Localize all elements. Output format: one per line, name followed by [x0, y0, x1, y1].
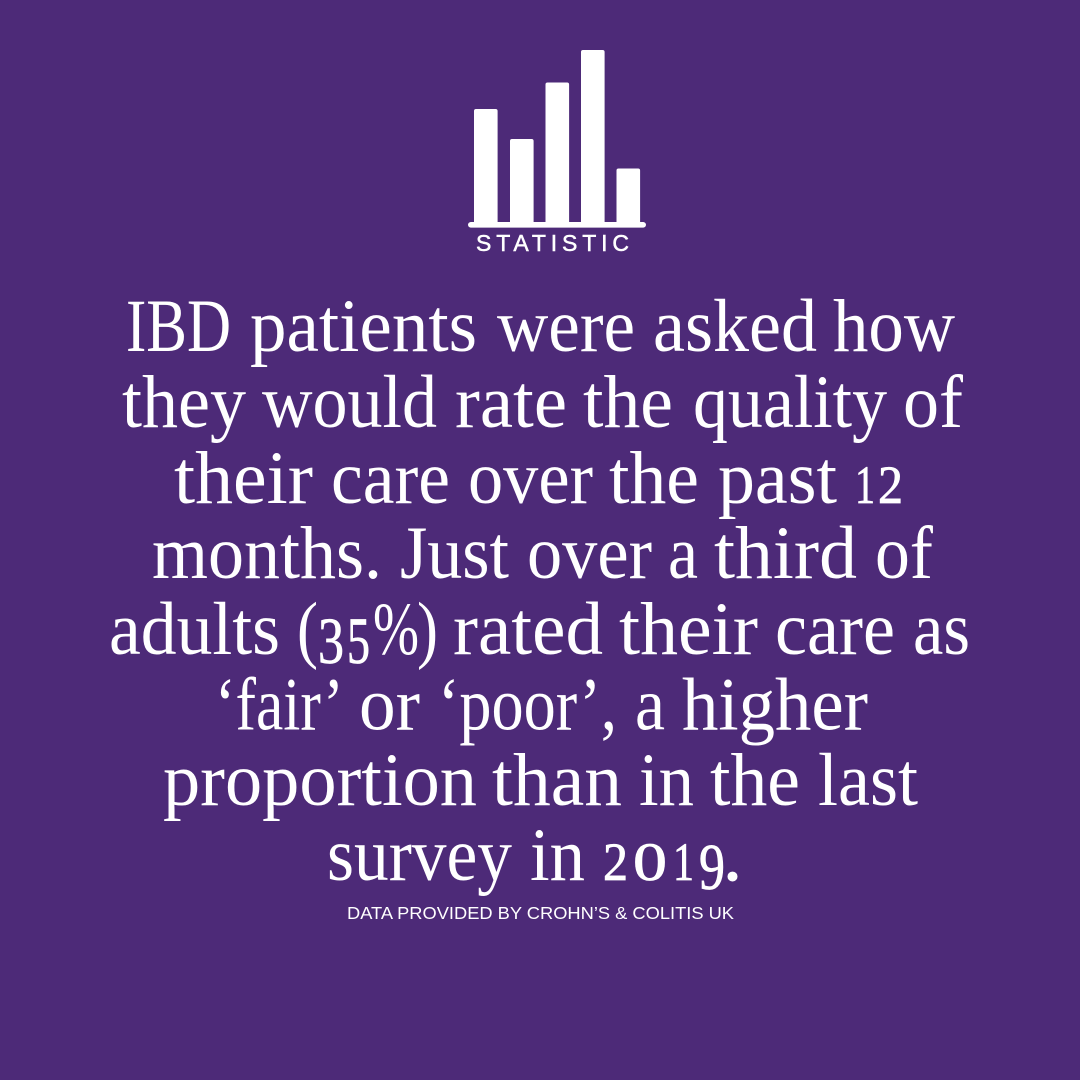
main statement text: care	[775, 588, 895, 671]
main statement text: the	[609, 437, 699, 520]
main statement text: ‘fair’	[215, 664, 339, 746]
main statement text: %	[373, 588, 419, 671]
main statement text: )	[417, 588, 438, 671]
source credit: DATA PROVIDED BY CROHN’S & COLITIS UK	[347, 903, 734, 923]
main statement text: the	[583, 361, 673, 444]
icon: bar chart	[468, 50, 646, 228]
main statement text: higher	[682, 664, 868, 746]
main statement text: (	[297, 588, 318, 671]
main statement text: 5	[347, 605, 370, 678]
main statement text: were	[497, 285, 635, 368]
main statement text: IBD	[126, 285, 231, 368]
main statement text: or	[359, 664, 420, 746]
main statement text: survey	[327, 814, 512, 897]
main statement text: over	[468, 437, 593, 520]
main statement text: 2	[878, 455, 903, 515]
main statement text: of	[903, 361, 963, 444]
main statement text: over	[527, 512, 652, 595]
main statement text: 2	[603, 832, 628, 892]
main statement text: Just	[400, 512, 509, 595]
main statement text: of	[875, 512, 933, 595]
main statement text: past	[718, 437, 837, 520]
main statement text: 0	[633, 832, 667, 892]
main statement text: a	[635, 664, 665, 746]
main statement text: adults	[109, 588, 280, 671]
main statement text: 9	[699, 831, 725, 904]
main statement text: they	[122, 361, 246, 444]
main statement text: last	[818, 739, 918, 822]
main statement text: quality	[693, 361, 887, 444]
main statement text: care	[331, 437, 450, 520]
main statement text: in	[639, 739, 694, 822]
main statement text	[109, 285, 970, 904]
main statement text: patients	[250, 285, 477, 368]
main statement text: how	[833, 285, 955, 368]
main statement text: 3	[318, 605, 344, 678]
main statement text: rated	[453, 588, 603, 671]
main statement text: months.	[152, 512, 382, 595]
main statement text: proportion	[163, 739, 477, 822]
main statement text: 1	[855, 455, 875, 515]
main statement text: 1	[673, 832, 694, 892]
main statement text: would	[262, 361, 437, 444]
main statement text: their	[174, 437, 313, 520]
main statement text: than	[492, 739, 622, 822]
main statement text: in	[530, 814, 585, 897]
main statement text: asked	[653, 285, 817, 368]
main statement text: the	[710, 739, 800, 822]
label: STATISTIC: STATISTIC	[476, 230, 629, 256]
main statement text: as	[913, 588, 970, 671]
main statement text: rate	[455, 361, 567, 444]
main statement text: a	[668, 512, 698, 595]
main statement text: their	[619, 588, 758, 671]
main statement text: third	[714, 512, 857, 595]
main statement text: ‘poor’,	[438, 664, 617, 746]
main statement text: .	[723, 814, 742, 897]
